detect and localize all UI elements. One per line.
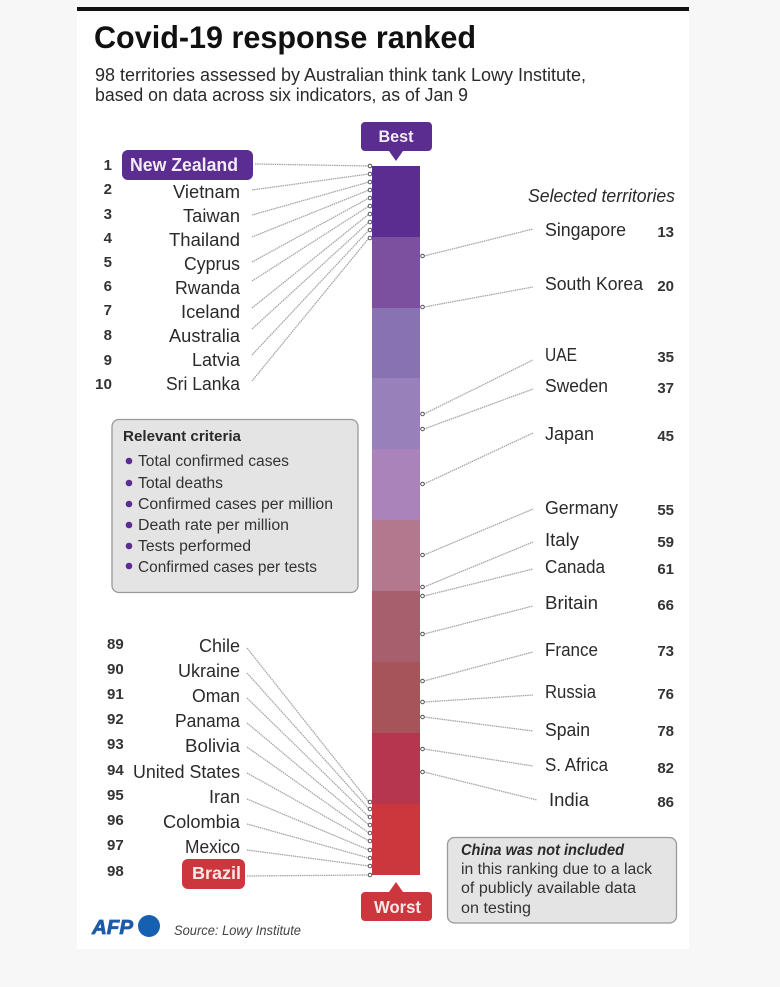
top ten list: 9 <box>104 352 112 369</box>
selected territories list: Selected territories <box>528 186 675 206</box>
panel: China note: China was not included <box>461 842 624 859</box>
panel: relevant criteria: Relevant criteria <box>123 428 242 445</box>
bottom ten list: Mexico <box>185 837 240 857</box>
highlight: Brazil: Brazil <box>192 863 241 883</box>
top ten list: Australia <box>169 326 241 346</box>
panel: China note <box>448 838 676 923</box>
top ten list: 10 <box>95 376 112 393</box>
top ten list: Iceland <box>181 302 240 322</box>
selected territories list: France <box>545 640 598 660</box>
selected territories list: 82 <box>657 760 674 777</box>
bottom ten list: 92 <box>107 711 124 728</box>
selected territories list: 55 <box>657 502 674 519</box>
selected territories list: 37 <box>657 380 674 397</box>
bottom ten list: 93 <box>107 736 124 753</box>
bottom ten list: 89 <box>107 636 124 653</box>
selected territories list: 66 <box>657 597 674 614</box>
selected territories list: 61 <box>657 561 674 578</box>
top ten list: Thailand <box>169 230 240 250</box>
panel: relevant criteria: Total deaths <box>138 475 223 492</box>
top ten list: 1 <box>104 157 112 174</box>
worst label <box>361 882 432 921</box>
selected territories list: 73 <box>657 643 674 660</box>
selected territories list: 59 <box>657 534 674 551</box>
subtitle: based on data across six indicators, as of Jan 9 <box>95 84 468 105</box>
bottom ten list: 91 <box>107 686 124 703</box>
highlight: Brazil <box>182 859 245 889</box>
bottom ten list: United States <box>133 762 240 782</box>
AFP logo <box>91 915 160 939</box>
selected territories list: Russia <box>545 682 597 702</box>
highlight: New Zealand <box>122 150 253 180</box>
top ten list: 4 <box>104 230 113 247</box>
bottom ten connector lines <box>247 648 372 877</box>
white card background <box>77 7 689 949</box>
selected territories list: Singapore <box>545 220 626 240</box>
bottom ten list: 96 <box>107 812 124 829</box>
bottom ten list: Ukraine <box>178 661 240 681</box>
top ten list: Rwanda <box>175 278 241 298</box>
bottom ten list: Oman <box>192 686 240 706</box>
selected territories list: Sweden <box>545 376 608 396</box>
selected territories list: UAE <box>545 345 577 365</box>
title: Covid-19 response ranked <box>94 19 476 55</box>
bottom ten list: Bolivia <box>185 736 241 756</box>
selected territories list: 78 <box>657 723 674 740</box>
panel: relevant criteria: Total confirmed cases <box>138 453 289 470</box>
panel: relevant criteria: Confirmed cases per tests <box>138 559 317 576</box>
top ten list <box>95 150 253 394</box>
highlight: New Zealand: New Zealand <box>130 155 238 175</box>
top ten list: Vietnam <box>173 182 240 202</box>
top ten list: Cyprus <box>184 254 240 274</box>
selected territories list: Britain <box>545 593 598 613</box>
selected territories list: 35 <box>657 349 674 366</box>
selected territories list: India <box>549 790 590 810</box>
selected territories list: 86 <box>657 794 674 811</box>
bottom ten list: 94 <box>107 762 124 779</box>
selected territories list <box>528 186 675 811</box>
top ten list: 5 <box>104 254 112 271</box>
panel: relevant criteria: Tests performed <box>138 538 251 555</box>
top ten list: 2 <box>104 181 112 198</box>
selected territories list: Spain <box>545 720 590 740</box>
panel: China note: in this ranking due to a lack <box>461 861 652 878</box>
best label <box>361 122 432 161</box>
bottom ten list <box>107 636 245 889</box>
source: Source: Lowy Institute <box>174 922 301 938</box>
bottom ten list: Colombia <box>163 812 241 832</box>
bottom ten list: 95 <box>107 787 124 804</box>
panel: relevant criteria: Death rate per million <box>138 517 289 534</box>
selected territories list: S. Africa <box>545 755 609 775</box>
bottom ten list: Panama <box>175 711 241 731</box>
bottom ten list: 98 <box>107 863 124 880</box>
selected territories list: 20 <box>657 278 674 295</box>
panel: China note: on testing <box>461 900 531 917</box>
selected territories list: Germany <box>545 498 618 518</box>
AFP logo: AFP <box>91 917 134 939</box>
bottom ten list: 90 <box>107 661 124 678</box>
top ten list: 7 <box>104 302 112 319</box>
subtitle: 98 territories assessed by Australian think tank Lowy Institute, <box>95 64 586 85</box>
panel: relevant criteria <box>112 420 358 592</box>
selected territories list: Japan <box>545 424 594 444</box>
bottom ten list: Chile <box>199 636 240 656</box>
subtitle <box>95 64 586 105</box>
bottom ten list: 97 <box>107 837 124 854</box>
selected territories list: South Korea <box>545 274 644 294</box>
selected territories list: 76 <box>657 686 674 703</box>
top ten list: Latvia <box>192 350 241 370</box>
selected territories list: Italy <box>545 530 579 550</box>
worst label: Worst <box>374 897 421 917</box>
selected territories list: Canada <box>545 557 606 577</box>
ranking colour bar <box>372 166 420 875</box>
selected territories list: 45 <box>657 428 674 445</box>
best label: Best <box>378 127 414 146</box>
top ten connector lines <box>252 164 372 381</box>
top ten list: 6 <box>104 278 112 295</box>
selected territories connector lines <box>421 229 537 800</box>
bottom ten list: Iran <box>209 787 240 807</box>
top ten list: Taiwan <box>183 206 240 226</box>
panel: China note: of publicly available data <box>461 880 636 897</box>
top ten list: 8 <box>104 327 112 344</box>
top ten list: Sri Lanka <box>166 374 241 394</box>
top ten list: 3 <box>104 206 112 223</box>
top black rule <box>77 7 689 11</box>
selected territories list: 13 <box>657 224 674 241</box>
panel: relevant criteria: Confirmed cases per million <box>138 496 333 513</box>
